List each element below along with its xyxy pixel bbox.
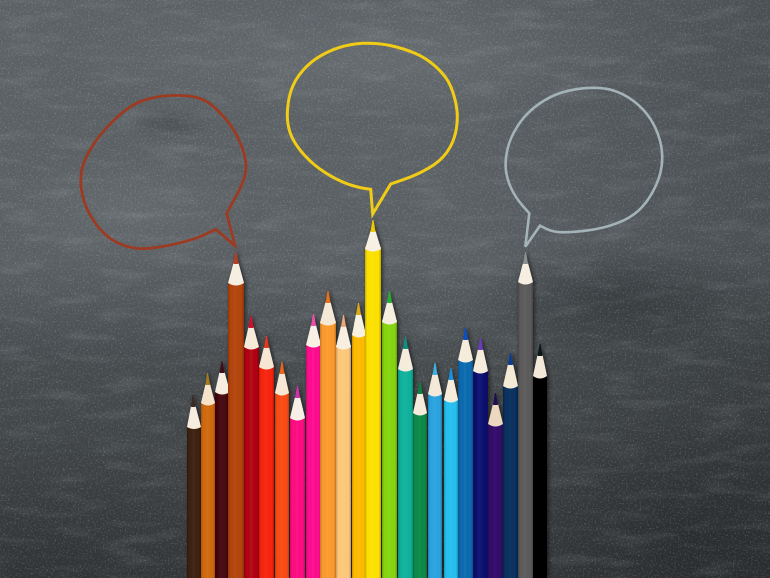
pencil: purple — [488, 393, 503, 578]
pencil: green — [382, 291, 397, 578]
pencil: maroon — [215, 361, 230, 578]
pencil: orange red — [275, 362, 289, 578]
pencil: dark green — [413, 382, 427, 578]
pencil: yellow — [365, 220, 381, 578]
pencil: sky blue — [428, 363, 442, 578]
speech bubble: brown — [81, 95, 246, 249]
pencil: long brown — [228, 252, 244, 578]
pencil: navy — [503, 353, 518, 578]
pencil: ochre orange — [201, 373, 215, 578]
pencil: light blue — [444, 368, 458, 578]
pencil: teal — [398, 337, 413, 578]
pencil: indigo — [473, 338, 488, 578]
pencil: magenta — [290, 386, 305, 578]
pencil: crimson — [244, 316, 259, 578]
speech bubble: yellow — [287, 43, 457, 214]
pencil: peach — [336, 315, 351, 578]
pencil: red — [259, 336, 274, 578]
pencil: long grey — [518, 252, 533, 578]
pencil group — [187, 220, 547, 578]
pencil: dark brown — [187, 395, 201, 578]
pencil: amber — [352, 303, 366, 578]
pencil: blue — [458, 328, 473, 578]
pencil: orange — [320, 291, 336, 578]
pencil: black — [533, 344, 547, 578]
speech bubble: grey — [506, 88, 662, 247]
pencil: pink — [306, 314, 321, 578]
